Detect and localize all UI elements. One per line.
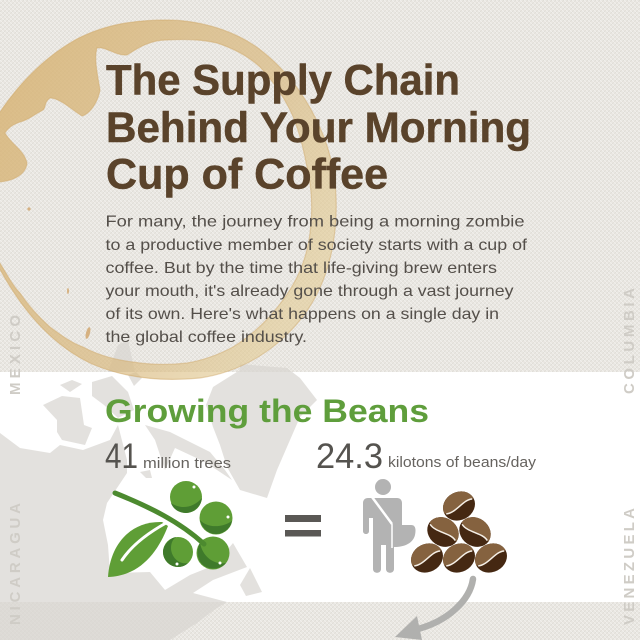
side label: Columbia: COLUMBIA	[621, 288, 638, 394]
title: The Supply Chain	[106, 58, 460, 104]
section heading: growing the beans: Growing the Beans	[105, 393, 429, 429]
intro paragraph	[106, 214, 528, 346]
intro paragraph: to a productive member of society starts with a cup of	[106, 237, 528, 254]
title	[106, 58, 531, 198]
intro paragraph: For many, the journey from being a morning zombie	[106, 214, 525, 230]
coffee ring stain	[0, 20, 336, 379]
side label: Mexico: MEXICO	[7, 315, 24, 395]
icon: farmer with satchel	[363, 479, 416, 573]
title: Cup of Coffee	[106, 152, 388, 198]
stat: million trees	[105, 437, 231, 476]
white content band	[0, 372, 640, 602]
stat: million trees: million trees	[143, 455, 231, 472]
side label: Nicaragua: NICARAGUA	[7, 503, 24, 625]
arrow to next section	[395, 579, 473, 640]
stat: kilotons of beans: 24.3	[316, 437, 383, 476]
small coffee drips	[27, 207, 91, 339]
stat: kilotons of beans	[316, 437, 537, 476]
icon: coffee branch with green cherries and leaf	[108, 481, 232, 577]
intro paragraph: your mouth, it's already gone through a vast journey	[106, 283, 514, 300]
intro paragraph: of its own. Here's what happens on a single day in	[106, 306, 499, 323]
world map backdrop	[0, 340, 317, 640]
icon: pile of coffee beans	[406, 486, 512, 578]
intro paragraph: the global coffee industry.	[106, 329, 307, 346]
intro paragraph: coffee. But by the time that life-giving brew enters	[106, 260, 497, 277]
stat: million trees: 41	[105, 437, 138, 476]
title: Behind Your Morning	[106, 105, 531, 152]
equals sign	[285, 515, 321, 536]
side label: Venezuela: VENEZUELA	[621, 508, 638, 625]
stat: kilotons of beans: kilotons of beans/day	[388, 454, 537, 471]
